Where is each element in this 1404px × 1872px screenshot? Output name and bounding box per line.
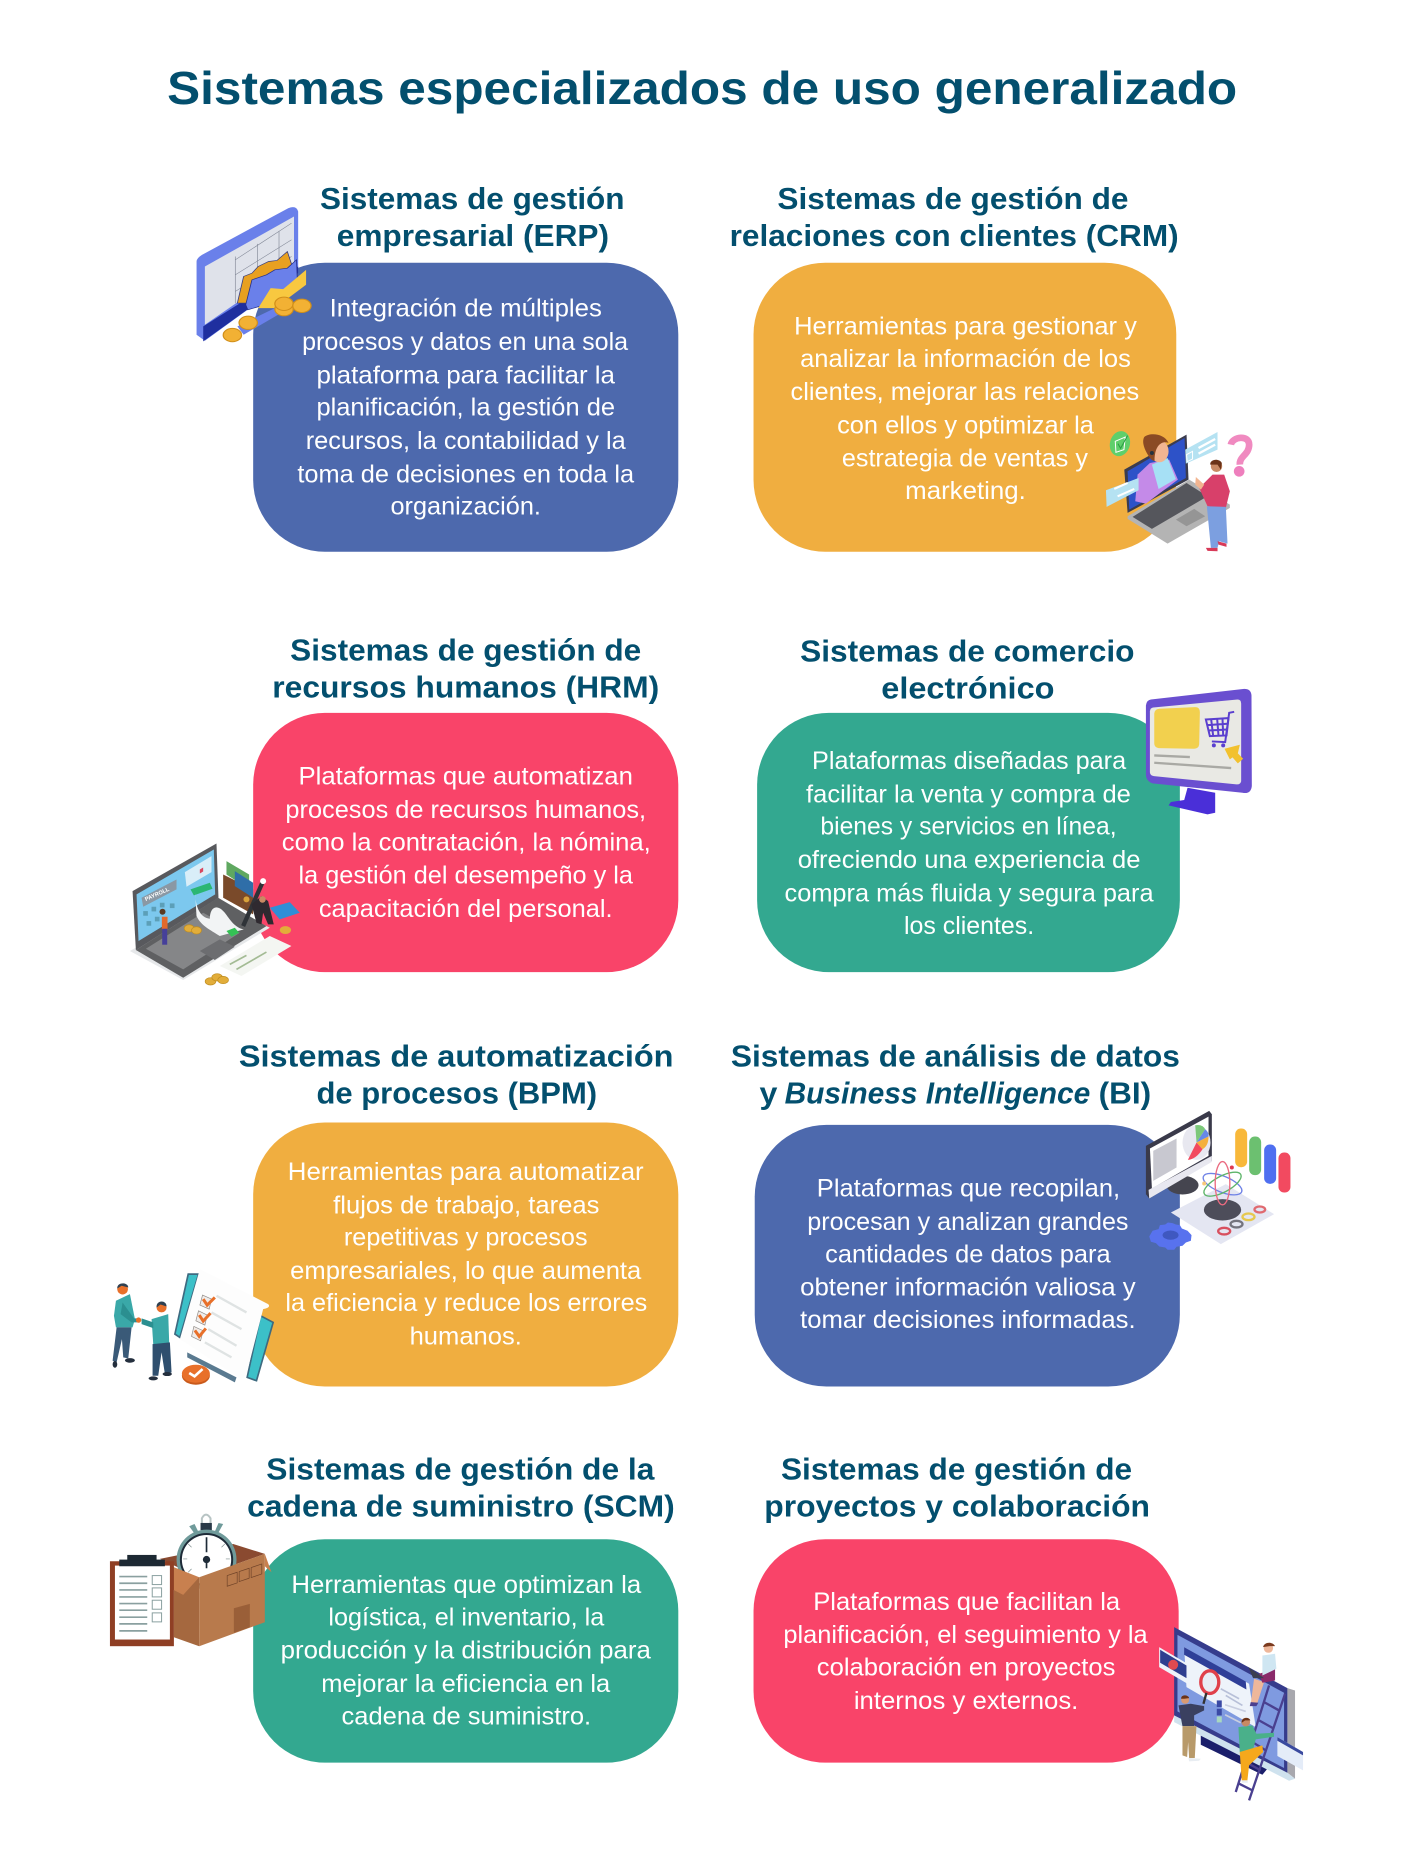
heading: project management: Sistemas de gestión de xyxy=(781,1453,1132,1487)
icon: analytics dashboard xyxy=(1146,1111,1290,1250)
heading: project management: proyectos y colaboración xyxy=(764,1490,1150,1524)
text: BI description: procesan y analizan grandes xyxy=(807,1209,1129,1236)
heading: project management xyxy=(764,1453,1150,1524)
text: BPM description xyxy=(285,1159,647,1351)
text: BI description: cantidades de datos para xyxy=(825,1241,1111,1268)
card: CRM xyxy=(754,263,1176,552)
heading: ERP xyxy=(320,182,625,253)
heading: BI: Business Intelligence xyxy=(785,1076,1090,1110)
text: BPM description: empresariales, lo que aumenta xyxy=(290,1258,642,1285)
text: ERP description: organización. xyxy=(390,494,541,521)
text: project management description: internos y externos. xyxy=(854,1688,1078,1715)
icon: payroll laptop: PAYROLL xyxy=(144,887,171,903)
text: HRM description: la gestión del desempeño y la xyxy=(299,863,633,890)
heading: HRM: Sistemas de gestión de xyxy=(290,633,641,667)
text: SCM description: logística, el inventario, la xyxy=(328,1604,605,1631)
panel: ERP xyxy=(197,182,678,552)
text: project management description: planificación, el seguimiento y la xyxy=(783,1622,1148,1649)
text: SCM description: cadena de suministro. xyxy=(342,1703,591,1730)
heading: BPM xyxy=(239,1039,674,1110)
text: BI description: tomar decisiones informadas. xyxy=(800,1307,1136,1334)
text: project management description: Plataformas que facilitan la xyxy=(813,1589,1120,1616)
panel: e-commerce xyxy=(757,635,1252,972)
icon: team on big screen with ladder xyxy=(1159,1627,1303,1800)
text: e-commerce description: facilitar la venta y compra de xyxy=(806,781,1131,808)
panel: HRM xyxy=(130,633,678,985)
icon: laptop with customer agent xyxy=(1106,429,1249,551)
heading: CRM: relaciones con clientes (CRM) xyxy=(730,219,1179,253)
card: BPM xyxy=(253,1123,678,1386)
icon: shopping monitor xyxy=(1146,689,1252,814)
text: e-commerce description xyxy=(785,748,1154,940)
text: CRM description xyxy=(791,313,1139,505)
text: HRM description xyxy=(282,764,651,923)
icon: payroll laptop xyxy=(130,843,300,985)
heading: CRM xyxy=(730,182,1179,253)
heading: HRM xyxy=(272,633,659,704)
text: CRM description: con ellos y optimizar la xyxy=(837,412,1094,439)
heading: BI: y xyxy=(759,1076,777,1110)
text: HRM description: como la contratación, la nómina, xyxy=(282,829,651,856)
text: HRM description: capacitación del personal. xyxy=(319,896,613,923)
text: SCM description: Herramientas que optimizan la xyxy=(291,1572,642,1599)
icon: monitor with chart and coins xyxy=(197,207,311,342)
text: ERP description: planificación, la gestión de xyxy=(316,395,615,422)
text: CRM description: estrategia de ventas y xyxy=(842,445,1089,472)
text: SCM description xyxy=(281,1572,651,1730)
text: e-commerce description: bienes y servicios en línea, xyxy=(820,814,1117,841)
heading: BI: (BI) xyxy=(1099,1076,1151,1110)
heading: ERP: empresarial (ERP) xyxy=(337,219,609,253)
icon: box, stopwatch and clipboard xyxy=(110,1515,271,1646)
text: ERP description: recursos, la contabilidad y la xyxy=(306,428,626,455)
card: ERP xyxy=(253,263,678,552)
text: e-commerce description: Plataformas diseñadas para xyxy=(812,748,1126,775)
text: CRM description: marketing. xyxy=(905,478,1026,505)
text: SCM description: mejorar la eficiencia en la xyxy=(321,1671,611,1698)
text: HRM description: Plataformas que automatizan xyxy=(299,764,633,791)
card: e-commerce xyxy=(757,713,1180,972)
heading: CRM: Sistemas de gestión de xyxy=(777,182,1129,216)
heading: BI: Sistemas de análisis de datos xyxy=(731,1039,1180,1073)
panel: project management xyxy=(754,1453,1303,1800)
heading: HRM: recursos humanos (HRM) xyxy=(272,670,659,704)
heading: BI xyxy=(731,1039,1180,1110)
text: SCM description: producción y la distribución para xyxy=(281,1638,651,1665)
text: BI description: Plataformas que recopilan, xyxy=(817,1176,1120,1203)
panel: BI xyxy=(731,1039,1290,1386)
text: ERP description: Integración de múltiples xyxy=(330,295,602,322)
text: CRM description: analizar la información de los xyxy=(800,346,1131,373)
heading: SCM: cadena de suministro (SCM) xyxy=(247,1490,675,1524)
text: BPM description: repetitivas y procesos xyxy=(344,1225,588,1252)
icon: handshake and checklist xyxy=(113,1269,273,1385)
card: BI xyxy=(755,1125,1180,1386)
text: BPM description: Herramientas para automatizar xyxy=(288,1159,644,1186)
heading: e-commerce xyxy=(800,635,1134,706)
text: e-commerce description: compra más fluida y segura para xyxy=(785,881,1154,908)
card: SCM xyxy=(253,1539,678,1763)
text: project management description xyxy=(783,1589,1148,1715)
text: e-commerce description: ofreciendo una experiencia de xyxy=(798,847,1140,874)
heading: SCM: Sistemas de gestión de la xyxy=(266,1453,656,1487)
text: ERP description: procesos y datos en una sola xyxy=(302,329,628,356)
text: project management description: colaboración en proyectos xyxy=(817,1654,1115,1681)
heading: BPM: de procesos (BPM) xyxy=(316,1076,597,1110)
text: BI description xyxy=(800,1176,1136,1334)
panel: CRM xyxy=(730,182,1249,552)
card: HRM xyxy=(253,713,678,972)
text: BPM description: la eficiencia y reduce los errores xyxy=(285,1290,647,1317)
text: CRM description: Herramientas para gestionar y xyxy=(794,313,1138,340)
text: BPM description: humanos. xyxy=(410,1324,522,1351)
heading: BPM: Sistemas de automatización xyxy=(239,1039,674,1073)
text: BPM description: flujos de trabajo, tareas xyxy=(333,1192,599,1219)
text: e-commerce description: los clientes. xyxy=(904,913,1034,940)
text: ERP description: toma de decisiones en toda la xyxy=(297,461,634,488)
heading: e-commerce: electrónico xyxy=(881,672,1054,706)
text: BI description: obtener información valiosa y xyxy=(800,1275,1136,1302)
title: Sistemas especializados de uso generalizado xyxy=(167,62,1237,114)
heading: SCM xyxy=(247,1453,675,1524)
text: HRM description: procesos de recursos humanos, xyxy=(285,797,646,824)
panel: SCM xyxy=(110,1453,678,1763)
heading: e-commerce: Sistemas de comercio xyxy=(800,635,1134,669)
text: CRM description: clientes, mejorar las relaciones xyxy=(791,379,1139,406)
panel: BPM xyxy=(113,1039,678,1386)
text: ERP description xyxy=(297,295,634,521)
card: project management xyxy=(754,1539,1179,1763)
heading: ERP: Sistemas de gestión xyxy=(320,182,625,216)
text: ERP description: plataforma para facilitar la xyxy=(316,362,615,389)
